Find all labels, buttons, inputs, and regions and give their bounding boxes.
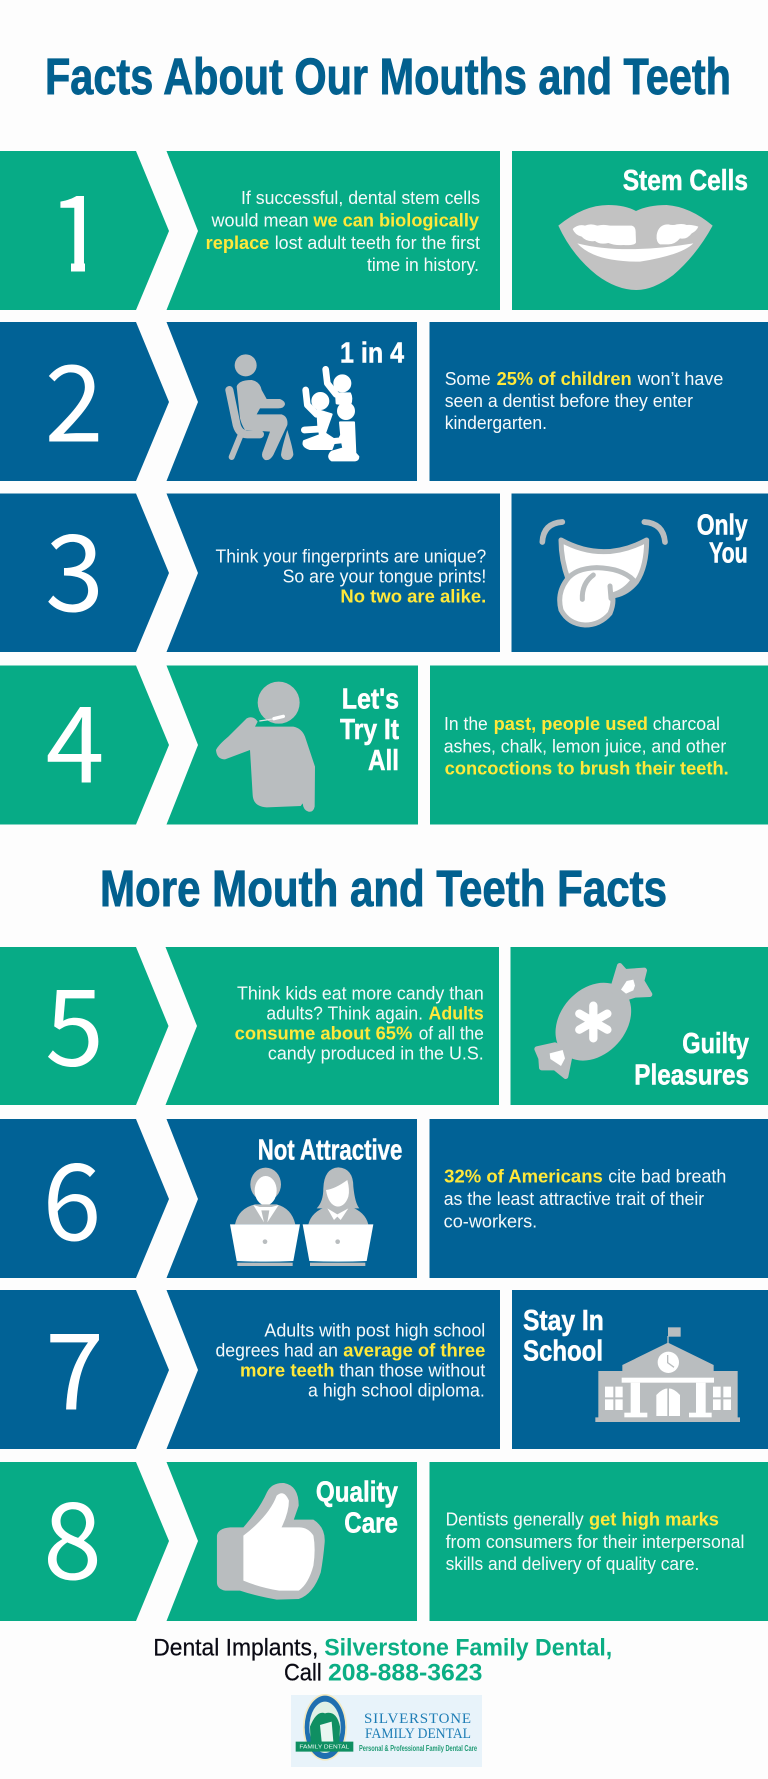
footer call to action xyxy=(153,1635,612,1687)
logo emblem: FAMILY DENTAL xyxy=(299,1745,349,1751)
text block 7: more teeth xyxy=(240,1361,334,1381)
text block 4: In the xyxy=(444,714,488,734)
footer call to action: Call xyxy=(284,1660,322,1687)
text block 8: get high marks xyxy=(589,1510,719,1530)
text block 8: from consumers for their interpersonal xyxy=(446,1532,744,1552)
icon: teacher and children xyxy=(229,354,358,460)
text block 7: degrees had an xyxy=(216,1341,338,1361)
text block 8 xyxy=(446,1510,744,1574)
text block 1: replace xyxy=(206,233,269,253)
logo emblem xyxy=(296,1694,353,1761)
heading: Let's Try It All: Let's xyxy=(342,683,399,715)
logo: Silverstone Family Dental xyxy=(291,1694,482,1767)
text block 7: average of three xyxy=(343,1341,485,1361)
text block 1: lost adult teeth for the first xyxy=(275,233,480,253)
text block 5: candy produced in the U.S. xyxy=(268,1043,484,1063)
text block 3: No two are alike. xyxy=(340,587,486,607)
heading: Let's Try It All: Try It xyxy=(340,714,399,746)
panel: fact 6 xyxy=(0,1117,768,1278)
number 8: 8 xyxy=(43,1456,102,1610)
heading: Let's Try It All xyxy=(340,683,399,777)
heading: Guilty Pleasures: Pleasures xyxy=(634,1059,749,1091)
text block 2: 25% of children xyxy=(497,369,632,389)
text block 7: Adults with post high school xyxy=(264,1321,485,1341)
number 1: 1 xyxy=(48,148,106,302)
number 7: 7 xyxy=(45,1286,104,1440)
text block 8: Dentists generally xyxy=(446,1510,584,1530)
heading: Guilty Pleasures: Guilty xyxy=(682,1028,749,1060)
icon: man and woman at laptops xyxy=(230,1167,373,1266)
panel: fact 7 xyxy=(0,1286,768,1449)
icon: person brushing teeth xyxy=(216,682,315,812)
icon: smiling mouth with missing tooth xyxy=(558,205,713,290)
number 4: 4 xyxy=(46,660,104,814)
text block 3: Think your fingerprints are unique? xyxy=(216,547,486,567)
icon: wrapped candy xyxy=(537,966,650,1076)
heading: Only You: You xyxy=(709,537,748,569)
text block 4: past, people used xyxy=(494,714,648,734)
logo wordmark: Personal & Professional Family Dental Care xyxy=(359,1744,477,1753)
text block 4 xyxy=(444,714,729,779)
heading: 1 in 4: 1 in 4 xyxy=(340,337,404,369)
text block 6 xyxy=(444,1167,726,1231)
panel: fact 5 xyxy=(0,942,768,1105)
text block 1: would mean xyxy=(211,210,308,230)
logo wordmark: FAMILY DENTAL xyxy=(365,1726,471,1742)
text block 2: Some xyxy=(445,369,491,389)
number 3: 3 xyxy=(45,488,104,642)
heading: Quality Care xyxy=(316,1477,398,1539)
panel: fact 1 xyxy=(0,148,768,310)
number 5: 5 xyxy=(45,942,104,1096)
text block 1 xyxy=(206,188,480,275)
heading: Quality Care: Care xyxy=(344,1507,398,1539)
text block 5: Adults xyxy=(428,1003,484,1023)
heading: Quality Care: Quality xyxy=(316,1477,398,1509)
text block 8: skills and delivery of quality care. xyxy=(446,1554,699,1574)
text block 6: co-workers. xyxy=(444,1211,537,1231)
text block 6: 32% of Americans xyxy=(444,1167,603,1187)
text block 7 xyxy=(216,1321,485,1401)
text block 4: concoctions to brush their teeth. xyxy=(445,759,729,779)
text block 4: ashes, chalk, lemon juice, and other xyxy=(444,736,726,756)
text block 1: time in history. xyxy=(367,255,479,275)
text block 3 xyxy=(216,547,486,607)
number 2: 2 xyxy=(45,319,103,473)
heading: Let's Try It All: All xyxy=(368,745,399,777)
heading: Stay In School xyxy=(523,1305,604,1368)
heading: Stay In School: Stay In xyxy=(523,1305,604,1337)
text block 5: Think kids eat more candy than xyxy=(237,983,484,1003)
text block 6: as the least attractive trait of their xyxy=(444,1189,704,1209)
panel: fact 2 xyxy=(0,319,768,481)
icon: tongue sticking out xyxy=(542,522,665,625)
panel: fact 8 xyxy=(0,1456,768,1621)
subtitle: More Mouth and Teeth Facts xyxy=(100,860,667,917)
text block 2: won’t have xyxy=(637,369,723,389)
text block 1: If successful, dental stem cells xyxy=(241,188,480,208)
text block 5: adults? Think again. xyxy=(266,1003,423,1023)
text block 5: of all the xyxy=(419,1023,484,1043)
text block 1: we can biologically xyxy=(312,210,479,230)
text block 7: a high school diploma. xyxy=(308,1381,485,1401)
footer call to action: Silverstone Family Dental, xyxy=(324,1635,612,1662)
text block 6: cite bad breath xyxy=(608,1167,726,1187)
text block 2: seen a dentist before they enter xyxy=(445,391,693,411)
panel: fact 3 xyxy=(0,488,768,652)
heading: Only You: Only xyxy=(697,509,748,541)
panel: fact 4 xyxy=(0,660,768,824)
heading: Stay In School: School xyxy=(523,1336,603,1368)
logo wordmark: SILVERSTONE xyxy=(364,1711,471,1727)
text block 7: than those without xyxy=(339,1361,485,1381)
text block 3: So are your tongue prints! xyxy=(283,567,486,587)
text block 5 xyxy=(235,983,484,1063)
heading: Only You xyxy=(697,509,748,569)
icon: thumbs up xyxy=(217,1483,325,1600)
footer call to action: Dental Implants, xyxy=(153,1635,318,1662)
footer call to action: 208-888-3623 xyxy=(328,1660,482,1687)
text block 5: consume about 65% xyxy=(235,1023,412,1043)
logo wordmark xyxy=(359,1711,477,1753)
number 6: 6 xyxy=(43,1117,101,1271)
text block 2: kindergarten. xyxy=(445,413,547,433)
icon: school building xyxy=(595,1327,740,1422)
heading: Guilty Pleasures xyxy=(634,1028,749,1091)
text block 4: charcoal xyxy=(653,714,720,734)
text block 2 xyxy=(445,369,723,433)
heading: Stem Cells: Stem Cells xyxy=(623,165,748,197)
heading: Not Attractive: Not Attractive xyxy=(258,1134,402,1166)
